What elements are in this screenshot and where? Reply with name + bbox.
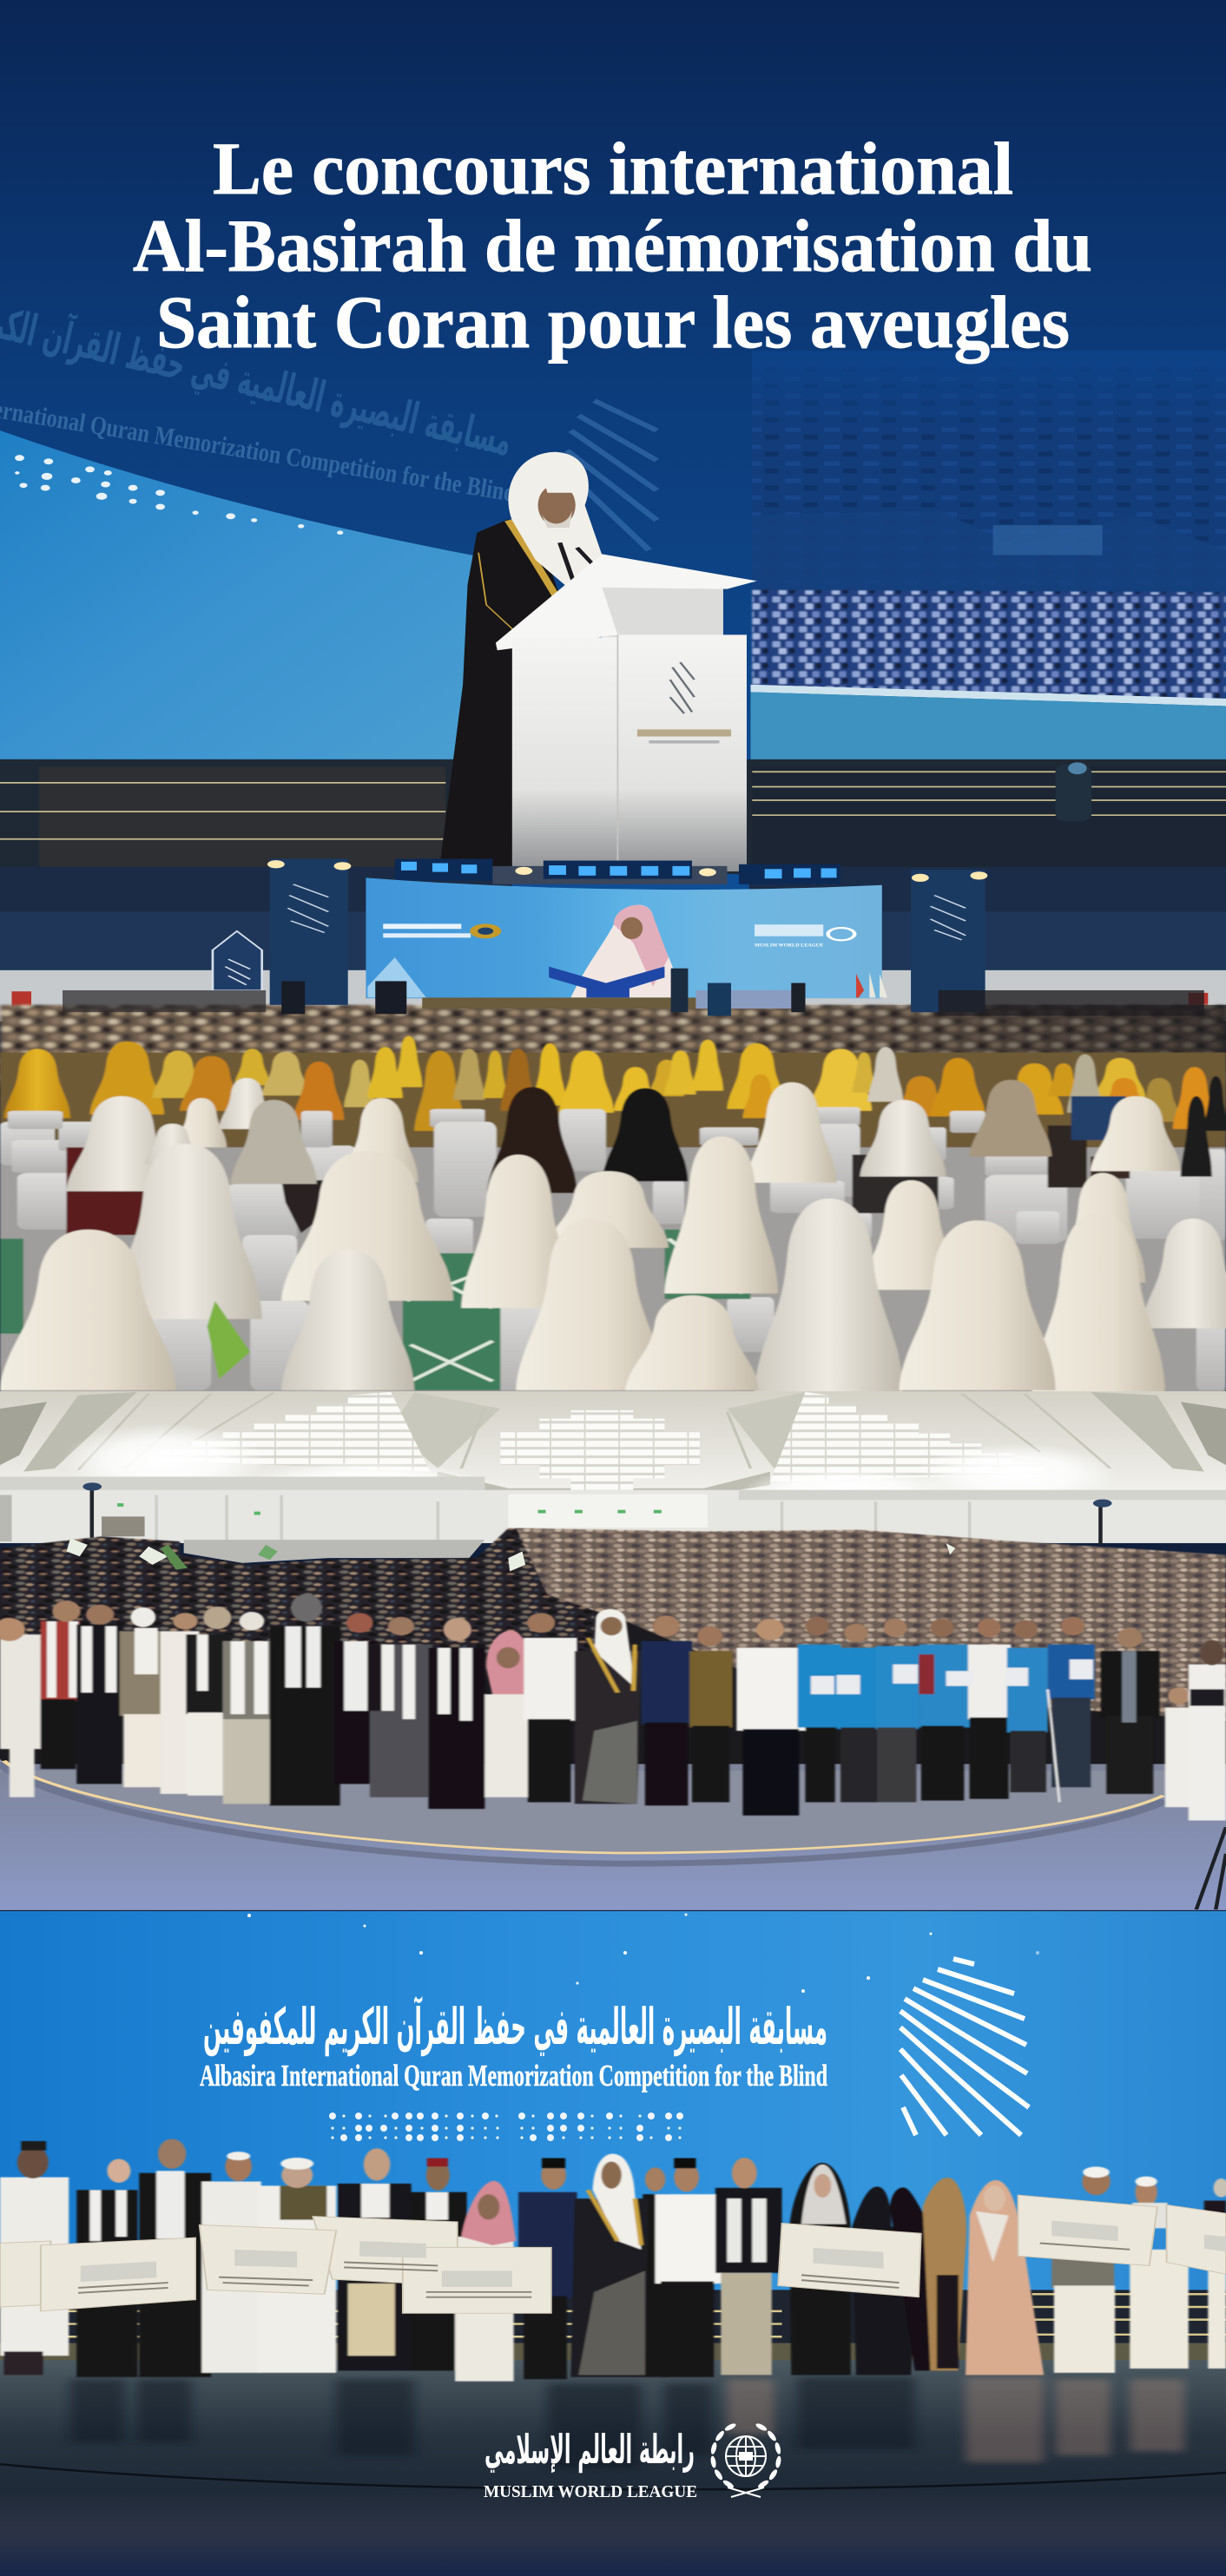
white-robed men left xyxy=(0,1600,276,1804)
man white robe xyxy=(1130,2177,1189,2369)
man white shirt xyxy=(656,2159,723,2377)
dignitary black robe xyxy=(570,2154,649,2377)
woman black with patterned scarf xyxy=(790,2163,851,2375)
right edge men and child xyxy=(1101,1628,1226,1821)
man gray vest xyxy=(1051,2166,1115,2373)
white seats in crowd xyxy=(184,1540,484,1563)
camera tripod xyxy=(1196,1827,1226,1909)
women in niqab xyxy=(853,2186,942,2375)
warm reflections on floor xyxy=(727,2377,1184,2462)
man behind xyxy=(643,2167,670,2377)
light hall wall xyxy=(0,970,1226,1022)
middle white scarves xyxy=(67,1078,1181,1191)
green patterned dresses xyxy=(0,1230,750,1390)
yellow scarf rows xyxy=(0,1036,1226,1151)
faint logo stripes on backdrop xyxy=(567,401,656,550)
screen base strip xyxy=(750,685,1226,706)
dark and patterned clothing xyxy=(67,1096,1130,1235)
man navy batik xyxy=(518,2159,577,2379)
navy back wall xyxy=(0,911,1226,972)
blue-vested volunteers xyxy=(798,1617,1095,1802)
stage steps xyxy=(0,759,1226,874)
people reflections on floor xyxy=(70,2377,915,2468)
dark stage floor left xyxy=(0,867,512,912)
floor and platform xyxy=(0,1759,1226,1910)
man 7 black xyxy=(411,2159,467,2370)
right tower banner xyxy=(911,870,987,1012)
stars on backdrop xyxy=(247,1913,1039,1993)
stage spotlight xyxy=(1056,762,1091,822)
sheikh pink ghutra xyxy=(455,2181,516,2382)
man 5 white with olive vest xyxy=(258,2158,336,2373)
person 2 black xyxy=(76,2159,137,2377)
batik-shirted men xyxy=(641,1615,806,1816)
small triangle on screen xyxy=(367,957,426,997)
woman peach dress xyxy=(966,2180,1044,2375)
background hall screen xyxy=(752,351,1226,600)
panel: seated audience facing big screen xyxy=(0,858,1226,1392)
title line 1: Le concours international xyxy=(213,127,1013,210)
man at right edge xyxy=(1204,2178,1226,2369)
braille dots on LED screen xyxy=(15,455,343,535)
dark scarves xyxy=(487,1088,1212,1193)
big LED screen xyxy=(366,877,882,998)
people row xyxy=(0,2139,1226,2382)
title line 2: Al-Basirah de mémorisation du xyxy=(133,204,1092,287)
award group xyxy=(0,2139,1226,2576)
white podium xyxy=(496,554,757,871)
panel: speaker at podium with blue stage xyxy=(0,0,1226,972)
panel: award ceremony on blue stage xyxy=(0,1911,1226,2576)
Muslim World League logo: رابطة العالم الإسلامي xyxy=(484,2426,695,2473)
LED arc xyxy=(4,1761,1163,1853)
man 3 black xyxy=(139,2139,211,2377)
stage steps xyxy=(0,2290,1226,2364)
woman with tan scarf xyxy=(923,2178,966,2370)
Muslim World League logo xyxy=(484,2422,781,2501)
reciter on screen xyxy=(570,905,676,997)
microphones xyxy=(557,542,593,581)
curved LED screen xyxy=(0,430,484,759)
ceiling light glows xyxy=(63,1423,1118,1514)
standing crowd, tan right xyxy=(516,1528,1226,1721)
braille dots xyxy=(329,2113,683,2141)
backdrop english title: Albasira International Quran Memorization Competition for the Blind xyxy=(200,2059,827,2093)
white seats xyxy=(0,1107,1226,1390)
man 6 black robe xyxy=(338,2148,412,2370)
dark base behind crowd xyxy=(0,1594,1226,1774)
screen left logo xyxy=(383,923,501,938)
stage people and flags xyxy=(63,969,1204,1015)
cheque text lines xyxy=(78,2243,1130,2297)
quran stand on screen xyxy=(549,967,664,997)
panel: group photo in white hall xyxy=(0,1389,1226,1910)
reflective floor xyxy=(0,2360,1226,2576)
standing crowd, dark left xyxy=(0,1528,594,1654)
man 1 white xyxy=(0,2141,69,2375)
floor dark arc line xyxy=(0,2464,1226,2489)
books held by volunteers xyxy=(811,1659,1093,1694)
back crowd xyxy=(0,1005,1226,1085)
logo english wordmark: MUSLIM WORLD LEAGUE xyxy=(484,2482,697,2501)
dark suited men xyxy=(270,1594,577,1809)
cheque detail boxes xyxy=(81,2221,1226,2287)
speaker robe xyxy=(439,452,602,868)
front row people xyxy=(0,1594,1226,1821)
white cane xyxy=(1048,1689,1059,1802)
man 4 white xyxy=(201,2152,261,2373)
truss beam and wall xyxy=(0,1476,1226,1545)
audience on right screen xyxy=(752,590,1226,700)
title line 3: Saint Coran pour les aveugles xyxy=(156,280,1070,364)
dark stage floor right xyxy=(749,867,1226,912)
dignitary in black robe xyxy=(575,1609,641,1804)
lighting truss xyxy=(395,858,840,884)
title xyxy=(133,127,1092,364)
striped fingerprint logo xyxy=(900,1959,1029,2135)
left tower banner xyxy=(267,858,351,1005)
man black vest beige pants xyxy=(715,2158,782,2375)
award cheques xyxy=(0,2195,1226,2313)
screen right logo: MUSLIM WORLD LEAGUE xyxy=(755,943,823,948)
front white scarves xyxy=(0,1136,1226,1392)
blue LED backdrop xyxy=(0,1911,1226,2432)
flags held by crowd xyxy=(67,1538,955,1571)
green flag xyxy=(208,1301,250,1379)
arch banner xyxy=(213,931,262,990)
screen right logo xyxy=(755,924,854,948)
ceiling acoustic block clusters xyxy=(161,1392,1044,1492)
logo globe emblem xyxy=(710,2422,781,2497)
grey lower band behind seats xyxy=(0,1147,1226,1392)
audience rows xyxy=(0,1036,1226,1392)
white tent ceiling xyxy=(0,1389,1226,1498)
